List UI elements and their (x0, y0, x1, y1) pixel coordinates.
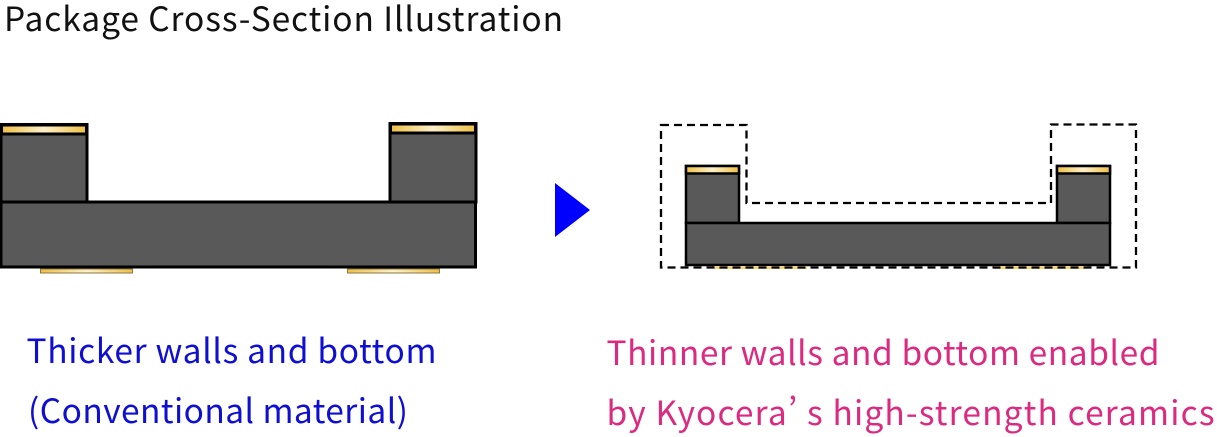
arrow (555, 183, 590, 237)
right top metallization (1057, 166, 1110, 174)
caption: Kyocera: Thinner walls and bottom enabled (606, 326, 1160, 375)
left wall (686, 166, 739, 223)
package base (1, 202, 476, 267)
right bottom pad (994, 266, 1087, 269)
right top metallization (390, 124, 476, 133)
left wall (1, 124, 87, 202)
caption: Kyocera (606, 326, 1214, 435)
diagram: conventional package cross-section (1, 124, 476, 273)
caption: conventional: (Conventional material) (28, 384, 408, 433)
right wall (390, 124, 476, 202)
package base (686, 223, 1110, 265)
caption: conventional (26, 324, 436, 433)
left bottom pad (714, 266, 807, 269)
right wall (1057, 166, 1110, 223)
diagram: thinner package cross-section (661, 124, 1136, 269)
caption: conventional: Thicker walls and bottom (26, 324, 436, 373)
left bottom pad (40, 269, 132, 273)
right bottom pad (348, 269, 440, 273)
dashed outline of conventional size (661, 124, 1136, 268)
left top metallization (2, 125, 86, 134)
caption: Kyocera: by Kyocera’ s high-strength ceramics (606, 386, 1214, 435)
left top metallization (686, 166, 739, 174)
